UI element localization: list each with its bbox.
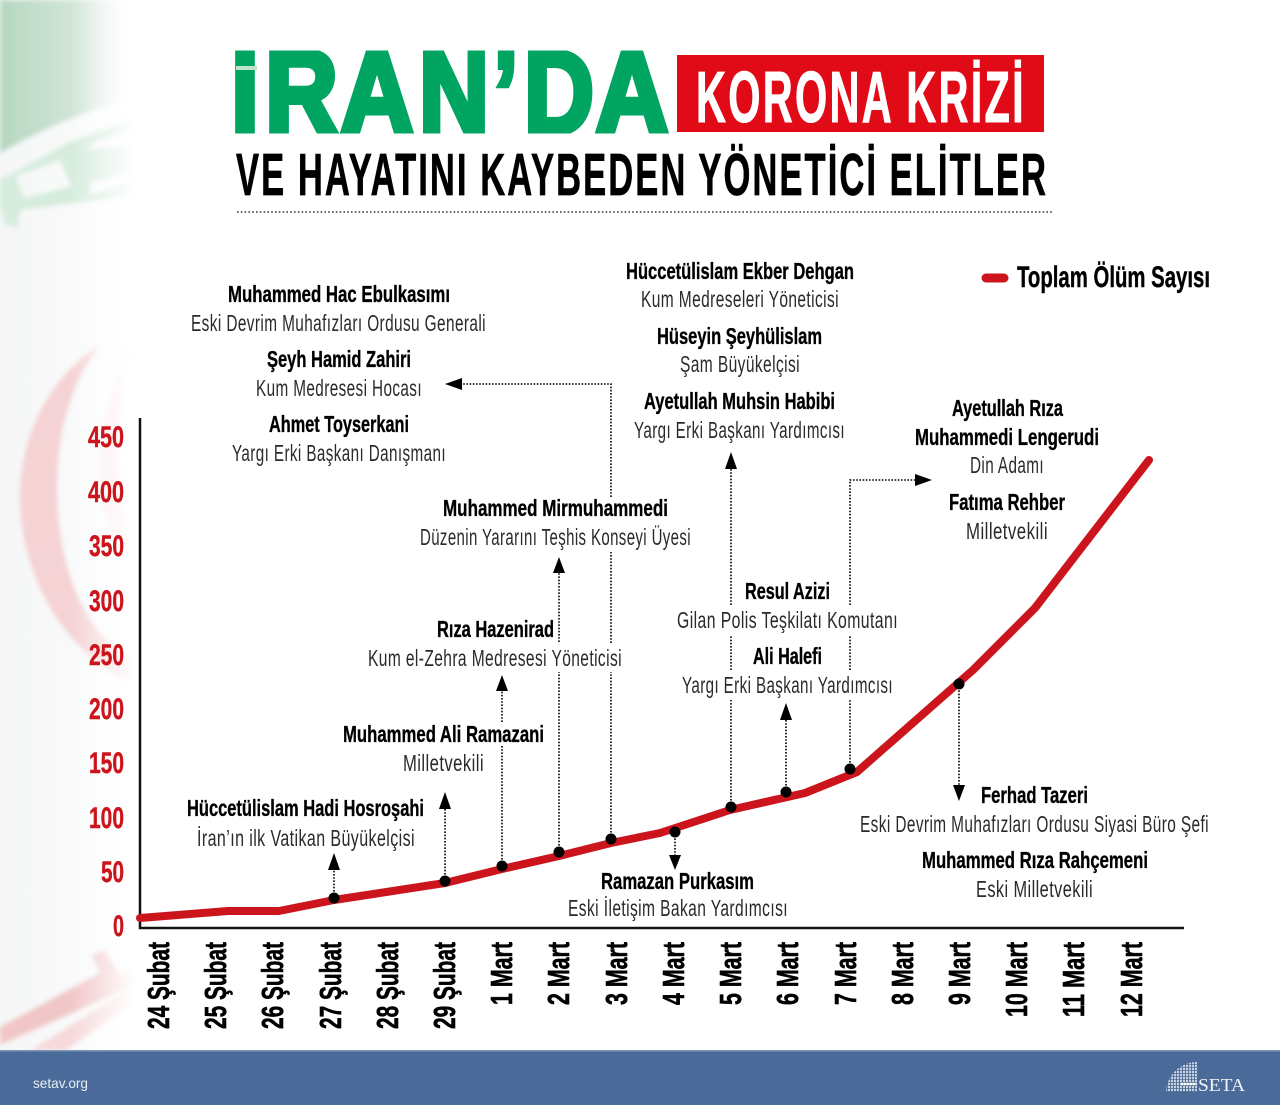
footer bar	[0, 1050, 1280, 1105]
arrow: 1 Mart	[496, 675, 508, 872]
y axis labels: 350	[89, 530, 124, 563]
arrow: 4 Mart	[669, 826, 681, 870]
y axis labels: 100	[89, 802, 124, 835]
title: İran'da: A	[340, 27, 414, 159]
callout: Muhammed Ali Ramazani: Muhammed Ali Ramazani	[343, 721, 544, 747]
callout: Ahmet Toyserkani: Ahmet Toyserkani	[269, 411, 409, 437]
callout: Muhammed Mirmuhammedi: Düzenin Yararını Teşhis Konseyi Üyesi	[420, 524, 691, 550]
callout: Rıza Hazenirad	[368, 616, 622, 671]
callout: Hüccetülislam Hadi Hosroşahi	[187, 795, 424, 851]
callout: Hüccetülislam Ekber Dehgan: Hüccetülislam Ekber Dehgan	[626, 258, 854, 284]
callout: Ayetullah Rıza Muhammedi Lengerudi: Muhammedi Lengerudi	[915, 424, 1099, 450]
title: İran'da: N	[419, 27, 489, 159]
callout: Muhammed Ali Ramazani: Milletvekili	[403, 750, 484, 776]
callout: Muhammed Hac Ebulkasımı: Muhammed Hac Ebulkasımı	[228, 281, 450, 307]
callout: Resul Azizi	[677, 578, 898, 633]
callout: Muhammed Hac Ebulkasımı	[191, 281, 486, 336]
x axis labels: dates: 26 Şubat	[255, 942, 290, 1029]
callout: Hüccetülislam Hadi Hosroşahi: Hüccetülislam Hadi Hosroşahi	[187, 795, 424, 821]
chart axes	[140, 418, 1184, 928]
y axis labels: 450	[88, 421, 124, 454]
x axis labels: dates: 25 Şubat	[198, 942, 233, 1029]
title: İran'da: ’	[494, 27, 518, 159]
callout: Ferhad Tazeri	[860, 782, 1209, 837]
callout: Ramazan Purkasım	[568, 868, 788, 921]
title badge: Korona Krizi	[677, 55, 1044, 138]
callout: Hüccetülislam Hadi Hosroşahi: İran’ın ilk Vatikan Büyükelçisi	[197, 825, 415, 851]
x axis labels: dates: 29 Şubat	[427, 942, 462, 1029]
arrow: 7 Mart	[844, 474, 932, 774]
arrow: 3 Mart	[445, 378, 616, 844]
background: faded Iranian flag	[0, 0, 140, 1051]
callout: Ahmet Toyserkani: Yargı Erki Başkanı Danışmanı	[232, 440, 446, 466]
footer url: setav.org	[33, 1075, 88, 1091]
callout: Muhammed Rıza Rahçemeni: Eski Milletvekili	[976, 876, 1093, 902]
callout: Şeyh Hamid Zahiri	[256, 346, 422, 401]
x axis labels: dates	[141, 942, 1149, 1029]
callout: Şeyh Hamid Zahiri: Şeyh Hamid Zahiri	[267, 346, 411, 372]
callout: Hüseyin Şeyhülislam	[657, 323, 822, 377]
y axis labels	[88, 421, 124, 943]
callout: Ayetullah Muhsin Habibi: Ayetullah Muhsin Habibi	[644, 388, 835, 414]
callout: Rıza Hazenirad: Kum el-Zehra Medresesi Yöneticisi	[368, 645, 622, 671]
x axis labels: dates: 10 Mart	[999, 942, 1034, 1017]
callout: Hüccetülislam Ekber Dehgan	[626, 258, 854, 312]
callout: Resul Azizi: Resul Azizi	[745, 578, 830, 604]
callout: Rıza Hazenirad: Rıza Hazenirad	[437, 616, 554, 642]
arrows and markers	[328, 378, 965, 904]
x axis labels: dates: 12 Mart	[1114, 942, 1149, 1017]
x axis labels: dates: 3 Mart	[599, 942, 634, 1005]
x axis labels: dates: 2 Mart	[541, 942, 576, 1005]
arrow: 27 Şubat	[328, 853, 340, 904]
x axis labels: dates: 27 Şubat	[313, 942, 348, 1029]
callout: Ayetullah Muhsin Habibi	[634, 388, 845, 443]
title: İran'da: R	[265, 27, 338, 159]
callout: Muhammed Mirmuhammedi	[420, 495, 691, 550]
callout: Resul Azizi: Gilan Polis Teşkilatı Komutanı	[677, 607, 898, 633]
callout: Ayetullah Rıza Muhammedi Lengerudi: Ayetullah Rıza	[952, 395, 1063, 421]
x axis labels: dates: 9 Mart	[942, 942, 977, 1005]
callout: Muhammed Mirmuhammedi: Muhammed Mirmuhammedi	[443, 495, 668, 521]
y axis labels: 150	[89, 747, 124, 780]
callout: Ramazan Purkasım: Ramazan Purkasım	[601, 868, 754, 894]
y axis labels: 400	[88, 476, 124, 509]
x axis labels: dates: 7 Mart	[828, 942, 863, 1005]
y axis labels: 250	[89, 639, 124, 672]
callout: Ali Halefi: Yargı Erki Başkanı Yardımcısı	[682, 672, 893, 698]
x axis labels: dates: 24 Şubat	[141, 942, 176, 1029]
callout: Ramazan Purkasım: Eski İletişim Bakan Yardımcısı	[568, 895, 788, 921]
callout: Muhammed Rıza Rahçemeni: Muhammed Rıza Rahçemeni	[922, 847, 1148, 873]
x axis labels: dates: 5 Mart	[713, 942, 748, 1005]
title badge: Korona Krizi: KORONA KRİZİ	[696, 58, 1026, 138]
callout: Şeyh Hamid Zahiri: Kum Medresesi Hocası	[256, 375, 422, 401]
callout: Ferhad Tazeri: Ferhad Tazeri	[981, 782, 1088, 808]
arrow: 6 Mart	[780, 703, 792, 798]
callout: Hüccetülislam Ekber Dehgan: Kum Medreseleri Yöneticisi	[641, 286, 839, 312]
callout: Muhammed Hac Ebulkasımı: Eski Devrim Muhafızları Ordusu Generali	[191, 310, 486, 336]
callout: Fatıma Rehber	[949, 489, 1065, 544]
callout: Muhammed Ali Ramazani	[343, 721, 544, 776]
callout: Ahmet Toyserkani	[232, 411, 446, 466]
line chart: total deaths	[140, 460, 1149, 918]
x axis labels: dates: 1 Mart	[484, 942, 519, 1005]
callout: Ayetullah Rıza Muhammedi Lengerudi: Din Adamı	[970, 452, 1044, 478]
x axis labels: dates: 4 Mart	[656, 942, 691, 1005]
icon: SETA globe logo	[1165, 1063, 1197, 1090]
callout: Fatıma Rehber: Fatıma Rehber	[949, 489, 1065, 515]
y axis labels: 200	[89, 693, 124, 726]
arrow: 5 Mart	[725, 452, 737, 812]
arrow: 29 Şubat	[439, 792, 451, 886]
title: İran'da: İ	[231, 27, 259, 159]
callout: Ayetullah Rıza Muhammedi Lengerudi	[915, 395, 1099, 478]
x axis labels: dates: 28 Şubat	[370, 942, 405, 1029]
y axis labels: 300	[89, 585, 124, 618]
callout: Ayetullah Muhsin Habibi: Yargı Erki Başkanı Yardımcısı	[634, 417, 845, 443]
title: İran'da: A	[595, 27, 669, 159]
title: İran'da	[235, 50, 670, 134]
arrow: 9 Mart	[953, 678, 965, 801]
x axis labels: dates: 6 Mart	[770, 942, 805, 1005]
callout: Ali Halefi: Ali Halefi	[753, 643, 822, 669]
callout: Hüseyin Şeyhülislam: Şam Büyükelçisi	[680, 351, 800, 377]
callout: Muhammed Rıza Rahçemeni	[922, 847, 1148, 902]
y axis labels: 50	[101, 856, 124, 889]
x axis labels: dates: 11 Mart	[1056, 942, 1091, 1017]
y axis labels: 0	[113, 910, 124, 943]
x axis labels: dates: 8 Mart	[885, 942, 920, 1005]
callout: Ali Halefi	[682, 643, 893, 698]
callout: Hüseyin Şeyhülislam: Hüseyin Şeyhülislam	[657, 323, 822, 349]
callout: Fatıma Rehber: Milletvekili	[966, 518, 1048, 544]
title: İran'da: D	[524, 27, 594, 159]
logo wordmark: SETA	[1198, 1075, 1245, 1095]
arrow: 2 Mart	[553, 557, 565, 858]
